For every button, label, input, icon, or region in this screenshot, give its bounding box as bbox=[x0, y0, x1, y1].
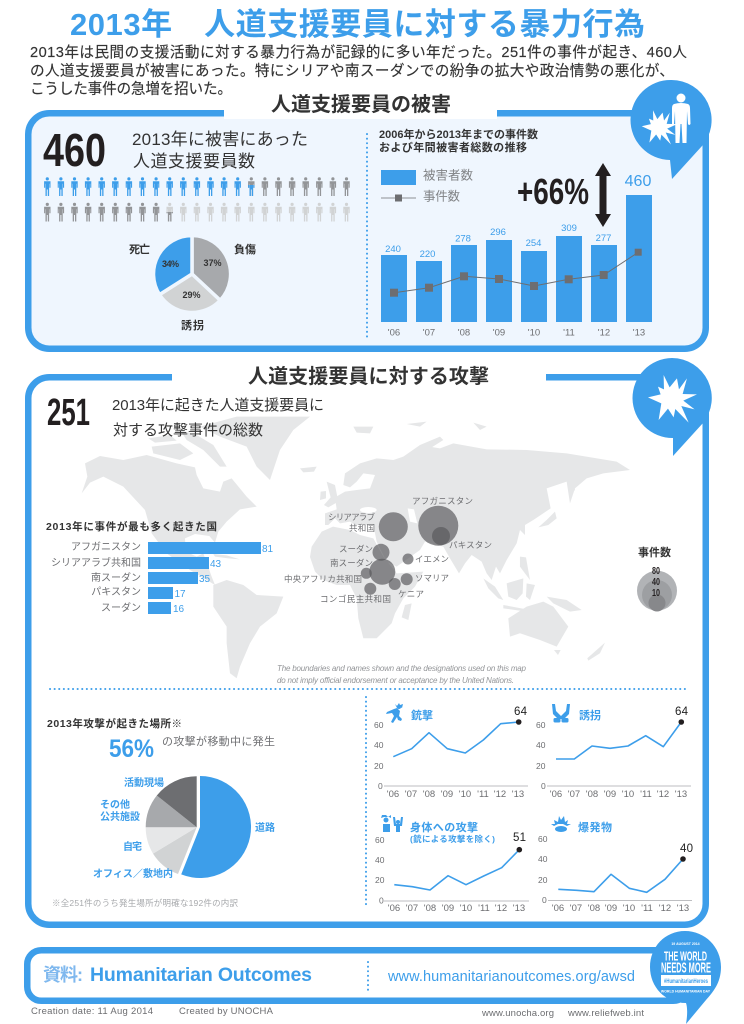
divider bbox=[50, 688, 685, 690]
map labels: スーダン bbox=[339, 544, 373, 554]
legend: 被害者数 bbox=[423, 168, 473, 182]
panel: victims bbox=[28, 93, 706, 349]
map labels: アフガニスタン bbox=[412, 496, 473, 506]
heading: attacks: 人道支援要員に対する攻撃 bbox=[248, 365, 489, 388]
chart: kidnapping: 20 bbox=[536, 761, 546, 771]
chart: explosives: 60 bbox=[538, 834, 548, 844]
badge: world humanitarian day: 19 AUGUST 2014 bbox=[671, 942, 700, 946]
pie labels: 負傷 bbox=[234, 242, 256, 256]
bar chart: top countries: シリアアラブ共和国 bbox=[51, 556, 141, 569]
icon bubble: burst bbox=[633, 358, 712, 456]
chart: explosives: 20 bbox=[538, 875, 548, 885]
chart: kidnapping: 0 bbox=[541, 781, 546, 791]
legend: bubble size: 80 bbox=[652, 566, 660, 577]
chart: kidnapping: '12 bbox=[657, 789, 669, 800]
intro text bbox=[30, 43, 687, 98]
footnote: ※全251件のうち発生場所が明確な192件の内訳 bbox=[52, 898, 238, 908]
pie labels bbox=[129, 242, 256, 332]
bar values bbox=[385, 173, 651, 260]
label: attacks total: 2013年に起きた人道支援要員に bbox=[112, 397, 324, 414]
chart: bodily assault: 20 bbox=[375, 875, 385, 885]
bar chart: top countries: スーダン bbox=[101, 601, 141, 614]
icon: gunfire bbox=[386, 703, 403, 723]
pie labels: オフィス／敷地内 bbox=[93, 867, 173, 880]
map labels: シリアアラブ bbox=[328, 512, 375, 522]
legend: bubble size: 40 bbox=[652, 577, 660, 588]
pie labels: 37% bbox=[204, 258, 222, 268]
chart: explosives: '07 bbox=[570, 903, 582, 914]
chart: gunfire: '11 bbox=[477, 789, 489, 800]
chart: kidnapping bbox=[536, 704, 691, 800]
pie chart: victim outcome bbox=[154, 235, 231, 313]
chart: bodily assault: '13 bbox=[513, 903, 525, 914]
pie labels: その他 bbox=[100, 798, 130, 811]
chart: kidnapping: '08 bbox=[586, 789, 598, 800]
divider bbox=[367, 962, 369, 990]
chart: bodily assault: (銃による攻撃を除く) bbox=[410, 834, 495, 844]
chart: kidnapping: 60 bbox=[536, 720, 546, 730]
chart: bodily assault: '07 bbox=[406, 903, 418, 914]
divider bbox=[365, 697, 367, 907]
chart: explosives: '06 bbox=[552, 903, 564, 914]
year axis labels: '07 bbox=[423, 328, 435, 338]
year axis labels: '06 bbox=[388, 328, 400, 338]
bar chart: top countries: 35 bbox=[199, 574, 211, 585]
year axis labels: '09 bbox=[493, 328, 505, 338]
heading: victims: 人道支援要員の被害 bbox=[271, 93, 451, 116]
chart: kidnapping: '06 bbox=[550, 789, 562, 800]
world map bbox=[82, 417, 630, 678]
bar values: 254 bbox=[526, 238, 541, 249]
panel: source bbox=[27, 950, 687, 1001]
pie labels: 誘拐 bbox=[181, 318, 204, 332]
badge: world humanitarian day: #HumanitarianHeroes bbox=[664, 978, 708, 985]
bar values: 277 bbox=[596, 233, 611, 244]
chart: gunfire bbox=[374, 703, 528, 800]
pie labels: 公共施設 bbox=[100, 810, 140, 823]
chart: bodily assault bbox=[375, 815, 529, 914]
year axis labels bbox=[388, 328, 645, 338]
line: incidents per year bbox=[390, 249, 642, 297]
chart: bodily assault: 51 bbox=[513, 832, 526, 844]
chart: gunfire: '12 bbox=[494, 789, 506, 800]
year axis labels: '08 bbox=[458, 328, 470, 338]
bar values: 278 bbox=[455, 234, 471, 244]
legend bbox=[381, 168, 473, 204]
badge: world humanitarian day bbox=[650, 931, 721, 1024]
chart: kidnapping: '07 bbox=[568, 789, 580, 800]
year axis labels: '11 bbox=[563, 328, 575, 338]
map bubbles bbox=[361, 506, 458, 595]
title: 2013年 人道支援要員に対する暴力行為 bbox=[70, 7, 645, 42]
chart: explosives: '13 bbox=[677, 903, 689, 914]
chart: explosives: '09 bbox=[605, 903, 617, 914]
badge: world humanitarian day: WORLD HUMANITARIAN DAY bbox=[661, 990, 711, 994]
legend: bubble size: 事件数 bbox=[638, 545, 671, 559]
chart: gunfire: 64 bbox=[514, 706, 528, 718]
chart: gunfire: 60 bbox=[374, 720, 384, 730]
number 251: 251 bbox=[47, 392, 90, 434]
map labels: イエメン bbox=[415, 554, 449, 564]
map labels: ケニア bbox=[398, 589, 424, 599]
pie labels: 34% bbox=[162, 259, 179, 269]
chart: explosives bbox=[538, 816, 693, 914]
label: attacks total: 対する攻撃事件の総数 bbox=[113, 422, 263, 439]
pictogram: people row 2 bbox=[44, 203, 350, 222]
map labels: コンゴ民主共和国 bbox=[320, 594, 391, 604]
pie labels: 道路 bbox=[255, 821, 275, 834]
pie labels: 死亡 bbox=[129, 242, 150, 256]
year axis labels: '10 bbox=[528, 328, 540, 338]
year axis labels: '12 bbox=[598, 328, 610, 338]
chart: kidnapping: '13 bbox=[675, 789, 687, 800]
arrow: double headed bbox=[595, 163, 611, 227]
map disclaimer: The boundaries and names shown and the designations used on this map bbox=[277, 664, 527, 673]
pictogram: people row 1 bbox=[44, 177, 350, 196]
chart: gunfire: '07 bbox=[405, 789, 417, 800]
bar chart: top countries: 16 bbox=[173, 604, 185, 615]
chart: explosives: 40 bbox=[538, 854, 548, 864]
bar chart: top countries: 南スーダン bbox=[91, 571, 141, 584]
icon bubble: person and burst bbox=[630, 80, 712, 179]
chart: explosives: 爆発物 bbox=[578, 820, 612, 834]
chart: bodily assault: 60 bbox=[375, 835, 385, 845]
chart: kidnapping: 誘拐 bbox=[579, 708, 601, 722]
chart: bodily assault: '10 bbox=[460, 903, 472, 914]
icon: explosive bbox=[551, 816, 571, 832]
map labels: パキスタン bbox=[449, 540, 492, 550]
footer credits: Created by UNOCHA bbox=[179, 1006, 274, 1017]
chart: gunfire: 0 bbox=[378, 781, 383, 791]
bar values: 240 bbox=[385, 244, 401, 255]
intro text: こうした事件の急増を招いた。 bbox=[30, 80, 232, 98]
chart: gunfire: '06 bbox=[387, 789, 399, 800]
map labels: ソマリア bbox=[415, 573, 449, 583]
chart: kidnapping: 64 bbox=[675, 706, 689, 718]
icon: kidnapping bbox=[552, 704, 570, 722]
bar chart: victims per year bbox=[381, 195, 652, 322]
pie labels bbox=[93, 776, 275, 880]
chart: kidnapping: '11 bbox=[640, 789, 652, 800]
chart: gunfire: 40 bbox=[374, 740, 384, 750]
label: victims total: 人道支援要員数 bbox=[133, 152, 255, 171]
bar values: 296 bbox=[490, 227, 506, 238]
chart: gunfire: '13 bbox=[512, 789, 524, 800]
footer credits bbox=[31, 1006, 644, 1019]
pie labels: 29% bbox=[182, 290, 200, 300]
label: in transit: の攻撃が移動中に発生 bbox=[162, 734, 275, 748]
chart: bodily assault: '09 bbox=[442, 903, 454, 914]
chart: gunfire: 銃撃 bbox=[411, 708, 433, 722]
chart: kidnapping: '09 bbox=[604, 789, 616, 800]
map labels: 南スーダン bbox=[330, 558, 373, 568]
footer credits: www.unocha.org bbox=[481, 1008, 554, 1019]
chart: bodily assault: 40 bbox=[375, 855, 385, 865]
pie labels: 活動現場 bbox=[124, 776, 164, 789]
bar chart: top countries: 43 bbox=[210, 559, 222, 570]
label: victims total bbox=[132, 130, 308, 171]
chart title: trend: および年間被害者総数の推移 bbox=[379, 140, 527, 154]
heading: attack locations: 2013年攻撃が起きた場所※ bbox=[47, 717, 182, 730]
chart: explosives: '11 bbox=[641, 903, 653, 914]
map labels: 共和国 bbox=[349, 523, 375, 533]
chart: gunfire: '10 bbox=[459, 789, 471, 800]
bar values: 309 bbox=[561, 223, 577, 234]
legend: bubble size bbox=[637, 545, 677, 612]
intro text: 2013年は民間の支援活動に対する暴力行為が記録的に多い年だった。251件の事件が起き、460人 bbox=[30, 43, 687, 61]
chart: bodily assault: '06 bbox=[388, 903, 400, 914]
chart: bodily assault: 0 bbox=[379, 896, 384, 906]
callout: plus 66 percent: +66% bbox=[517, 171, 589, 212]
map labels: 中央アフリカ共和国 bbox=[284, 574, 362, 584]
chart: bodily assault: '08 bbox=[424, 903, 436, 914]
bar chart: top countries: アフガニスタン bbox=[71, 541, 141, 553]
intro text: の人道支援要員が被害にあった。特にシリアや南スーダンでの紛争の拡大や政治情勢の悪化が、 bbox=[30, 62, 674, 80]
label: victims total: 2013年に被害にあった bbox=[132, 130, 308, 149]
chart: explosives: '12 bbox=[659, 903, 671, 914]
bar chart: top countries: パキスタン bbox=[91, 586, 141, 598]
chart: gunfire: '09 bbox=[441, 789, 453, 800]
panel: attacks bbox=[28, 365, 706, 925]
map labels bbox=[284, 496, 492, 604]
bar chart: top countries bbox=[46, 520, 274, 615]
chart: explosives: '08 bbox=[588, 903, 600, 914]
chart: bodily assault: '11 bbox=[478, 903, 490, 914]
pie labels: 自宅 bbox=[123, 840, 142, 853]
bar chart: top countries: 2013年に事件が最も多く起きた国 bbox=[46, 520, 217, 533]
chart title: trend bbox=[379, 127, 538, 154]
footer credits: Creation date: 11 Aug 2014 bbox=[31, 1006, 153, 1017]
chart: gunfire: 20 bbox=[374, 761, 384, 771]
chart title: trend: 2006年から2013年までの事件数 bbox=[379, 127, 538, 141]
chart: kidnapping: 40 bbox=[536, 740, 546, 750]
icon: assault bbox=[381, 815, 403, 832]
year axis labels: '13 bbox=[633, 328, 645, 338]
source name: Humanitarian Outcomes bbox=[90, 964, 312, 986]
chart: gunfire: '08 bbox=[423, 789, 435, 800]
number 460: 460 bbox=[43, 124, 106, 176]
bar values: 460 bbox=[625, 173, 651, 190]
footer credits: www.reliefweb.int bbox=[567, 1008, 644, 1019]
chart: kidnapping: '10 bbox=[622, 789, 634, 800]
legend: bubble size: 10 bbox=[652, 588, 660, 599]
number 56 percent: 56% bbox=[109, 735, 154, 763]
map disclaimer: do not imply official endorsement or acceptance by the United Nations. bbox=[277, 676, 514, 685]
chart: explosives: 40 bbox=[680, 843, 693, 855]
bar chart: top countries: 81 bbox=[262, 544, 274, 555]
legend: 事件数 bbox=[423, 188, 460, 204]
source url: www.humanitarianoutcomes.org/awsd bbox=[387, 969, 635, 985]
bar chart: top countries: 17 bbox=[174, 589, 186, 600]
pie chart: attack locations bbox=[146, 776, 251, 878]
badge: world humanitarian day: THE WORLD bbox=[664, 948, 707, 964]
chart: explosives: '10 bbox=[623, 903, 635, 914]
chart: bodily assault: 身体への攻撃 bbox=[410, 820, 478, 834]
bar values: 220 bbox=[420, 249, 435, 260]
divider bbox=[366, 134, 368, 337]
source label: 資料: bbox=[43, 965, 83, 985]
map disclaimer bbox=[277, 664, 527, 685]
label: attacks total bbox=[112, 397, 324, 439]
chart: explosives: 0 bbox=[542, 895, 547, 905]
chart: bodily assault: '12 bbox=[495, 903, 507, 914]
